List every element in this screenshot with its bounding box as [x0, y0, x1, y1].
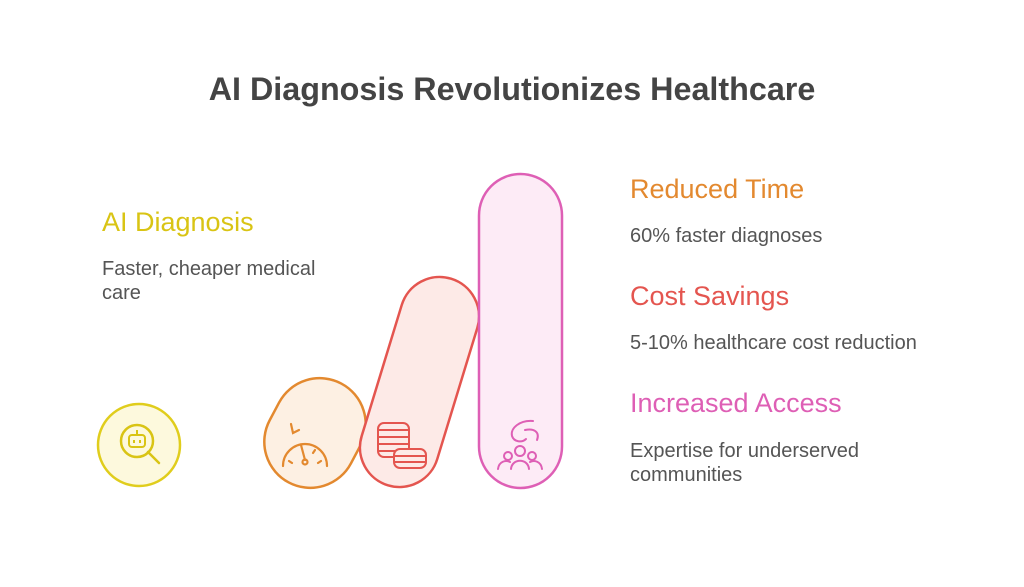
text: AI Diagnosis description: care — [102, 282, 141, 304]
icon: community — [498, 421, 542, 469]
heading: AI Diagnosis: AI Diagnosis — [102, 207, 254, 237]
panel: Increased Access — [630, 388, 859, 486]
text: AI Diagnosis description: Faster, cheaper medical — [102, 258, 315, 280]
pill: cost savings (red) — [350, 267, 489, 497]
icon: coins — [378, 423, 426, 468]
panel: Increased Access: communities — [630, 464, 742, 486]
panel: Reduced Time: 60% faster diagnoses — [630, 225, 822, 247]
panel: Cost Savings: Cost Savings — [630, 281, 789, 311]
panel: Increased Access: Increased Access — [630, 388, 842, 418]
panel: Cost Savings — [630, 281, 917, 354]
pill: increased access (pink) — [479, 174, 562, 488]
panel: Reduced Time: Reduced Time — [630, 174, 804, 204]
icon: AI magnifier circle — [98, 404, 180, 486]
panel: AI Diagnosis text — [102, 207, 315, 304]
icon: speedometer — [283, 424, 327, 466]
panel: Cost Savings: 5-10% healthcare cost reduction — [630, 332, 917, 354]
panel: Reduced Time — [630, 174, 822, 247]
title: AI Diagnosis Revolutionizes Healthcare — [209, 71, 815, 107]
panel: Increased Access: Expertise for underserved — [630, 440, 859, 462]
pill: reduced time (orange) — [248, 362, 382, 504]
